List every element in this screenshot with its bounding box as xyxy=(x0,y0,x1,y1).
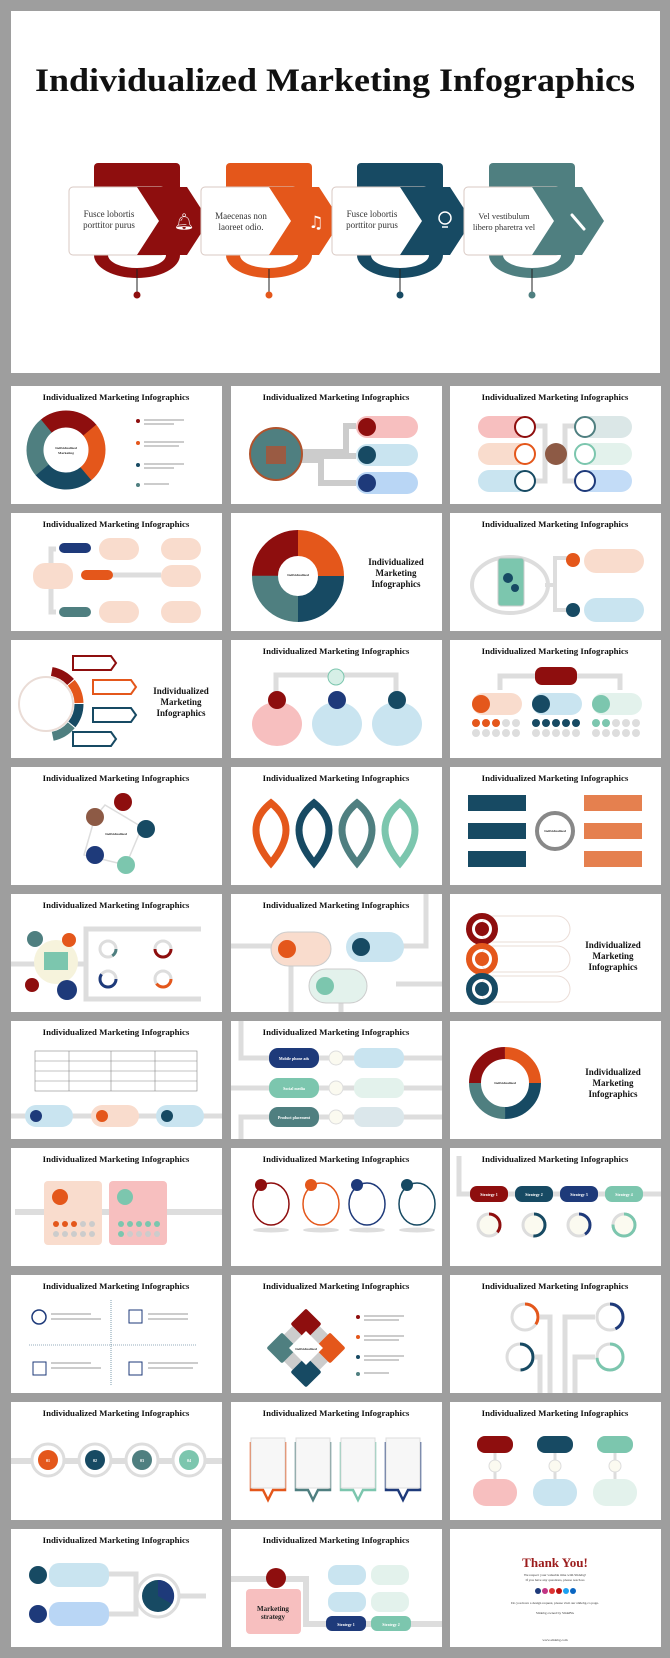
step 3: Fusce lobortis xyxy=(347,209,398,219)
panel: thumb 10 pentagon: Individualized xyxy=(105,832,127,836)
panel: thumb 20 four rings xyxy=(231,1148,442,1266)
panel: thumb 14 pipes: Individualized Marketing Infographics xyxy=(263,900,410,910)
panel: thumb 23 diamond: Individualized Marketing Infographics xyxy=(263,1281,410,1291)
panel: thumb 19 two cards: Individualized Marketing Infographics xyxy=(43,1154,190,1164)
panel: thumb 28 customers pie: Individualized Marketing Infographics xyxy=(43,1535,190,1545)
panel: thumb 15 rings xyxy=(450,894,661,1012)
panel: thumb 30 thank you: Slidebg owned by SlideBG xyxy=(536,1611,575,1615)
panel: thumb 22 quadrants: Individualized Marketing Infographics xyxy=(43,1281,190,1291)
panel: thumb 18 flower ring: Infographics xyxy=(588,1089,638,1099)
panel: thumb 9 strategy dots xyxy=(450,640,661,758)
panel: thumb 21 strategies: Strategy 1 xyxy=(480,1192,498,1197)
step 4 xyxy=(464,163,604,298)
panel: thumb 29 marketing strategy: Marketing xyxy=(257,1605,289,1613)
panel: thumb 29 marketing strategy: Strategy 2 xyxy=(382,1622,400,1627)
panel: thumb 29 marketing strategy: Individualized Marketing Infographics xyxy=(263,1535,410,1545)
panel: thumb 18 flower ring: Individualized xyxy=(494,1081,516,1085)
panel: thumb 17 channels rows: Social media xyxy=(283,1086,305,1091)
panel: thumb 17 channels rows: Individualized Marketing Infographics xyxy=(263,1027,410,1037)
panel: thumb 14 pipes xyxy=(231,894,442,1012)
panel: thumb 7 arcs: Infographics xyxy=(156,708,206,718)
step 4: libero pharetra vel xyxy=(473,222,536,232)
panel: thumb 12 bars: Individualized Marketing Infographics xyxy=(482,773,629,783)
panel: thumb 20 four rings: Individualized Marketing Infographics xyxy=(263,1154,410,1164)
panel: thumb 6 phone: Individualized Marketing Infographics xyxy=(482,519,629,529)
icon: bulb xyxy=(439,212,451,227)
icon: music: ♫ xyxy=(308,213,324,233)
panel: thumb 9 strategy dots: Individualized Marketing Infographics xyxy=(482,646,629,656)
step 2: laoreet odio. xyxy=(219,222,263,232)
panel: thumb 18 flower ring: Marketing xyxy=(592,1078,634,1088)
panel: thumb 1 donut: Individualized Marketing Infographics xyxy=(43,392,190,402)
panel: thumb 18 flower ring: Individualized xyxy=(585,1067,641,1077)
panel: thumb 30 thank you xyxy=(450,1529,661,1647)
panel: thumb 1 donut: Marketing xyxy=(58,451,74,455)
panel: thumb 4 channels xyxy=(11,513,222,631)
panel: thumb 13 ages xyxy=(11,894,222,1012)
panel: thumb 19 two cards xyxy=(11,1148,222,1266)
icon: bell: 🔔︎ xyxy=(174,212,194,231)
panel: thumb 7 arcs: Marketing xyxy=(160,697,202,707)
panel: thumb 7 arcs: Individualized xyxy=(153,686,209,696)
panel: thumb 7 arcs xyxy=(11,640,222,758)
panel: thumb 21 strategies: Strategy 4 xyxy=(615,1192,633,1197)
panel: thumb 5 flower: Marketing xyxy=(376,568,417,578)
panel: thumb 5 flower: Infographics xyxy=(371,579,421,589)
panel: thumb 12 bars: Individualized xyxy=(544,829,566,833)
panel: thumb 23 diamond: Individualized xyxy=(295,1347,317,1351)
panel: thumb 5 flower: Individualized xyxy=(287,573,309,577)
panel: thumb 21 strategies xyxy=(450,1148,661,1266)
panel: thumb 5 flower: Individualized xyxy=(368,557,424,567)
panel: thumb 17 channels rows: Product placement xyxy=(278,1115,311,1120)
panel: thumb 25 four steps xyxy=(11,1402,222,1520)
step 1: Fusce lobortis xyxy=(84,209,135,219)
panel: thumb 21 strategies: Strategy 2 xyxy=(525,1192,543,1197)
panel: thumb 30 thank you: Thank You! xyxy=(522,1555,588,1570)
panel: thumb 5 flower xyxy=(231,513,442,631)
panel: thumb 22 quadrants xyxy=(11,1275,222,1393)
panel: thumb 18 flower ring xyxy=(450,1021,661,1139)
panel: thumb 15 rings: Individualized xyxy=(585,940,641,950)
panel: thumb 13 ages: Individualized Marketing Infographics xyxy=(43,900,190,910)
panel: thumb 27 customer types: Individualized Marketing Infographics xyxy=(482,1408,629,1418)
panel: thumb 30 thank you: www.slidebg.com xyxy=(542,1638,568,1642)
icon: wrench xyxy=(572,215,584,229)
step 1: porttitor purus xyxy=(83,220,135,230)
panel: thumb 17 channels rows: Mobile phone ads xyxy=(279,1056,310,1061)
panel: thumb 8 three customers xyxy=(231,640,442,758)
panel: thumb 28 customers pie xyxy=(11,1529,222,1647)
panel: thumb 21 strategies: Individualized Marketing Infographics xyxy=(482,1154,629,1164)
panel: thumb 30 thank you: Do you have a design request, please visit our slidebg.co page. xyxy=(511,1601,599,1606)
panel: thumb 15 rings: Infographics xyxy=(588,962,638,972)
panel: thumb 1 donut xyxy=(11,386,222,504)
panel: thumb 25 four steps: 02 xyxy=(93,1458,97,1463)
panel: thumb 26 bookmarks xyxy=(231,1402,442,1520)
panel: thumb 30 thank you: If you have any questions, please reach us xyxy=(526,1578,585,1583)
panel: thumb 17 channels rows xyxy=(231,1021,442,1139)
panel: thumb 25 four steps: 03 xyxy=(140,1458,144,1463)
panel: thumb 4 channels: Individualized Marketing Infographics xyxy=(43,519,190,529)
step 3 xyxy=(332,163,472,298)
panel: thumb 30 thank you: We respect your valuable time with Slidebg! xyxy=(524,1573,586,1577)
panel: thumb 10 pentagon xyxy=(11,767,222,885)
panel: thumb 10 pentagon: Individualized Marketing Infographics xyxy=(43,773,190,783)
panel: thumb 3 megaphone xyxy=(450,386,661,504)
panel: thumb 23 diamond xyxy=(231,1275,442,1393)
step 2 xyxy=(201,163,341,298)
step 3: porttitor purus xyxy=(346,220,398,230)
panel: main slide xyxy=(11,11,660,373)
panel: thumb 2 customers: Individualized Marketing Infographics xyxy=(263,392,410,402)
panel: thumb 2 customers xyxy=(231,386,442,504)
panel: thumb 29 marketing strategy: Strategy 1 xyxy=(337,1622,355,1627)
panel: thumb 16 table: Individualized Marketing Infographics xyxy=(43,1027,190,1037)
panel: thumb 25 four steps: 04 xyxy=(187,1458,191,1463)
step 1 xyxy=(69,163,209,298)
panel: thumb 11 leaves xyxy=(231,767,442,885)
panel: thumb 24 donut pipes xyxy=(450,1275,661,1393)
panel: thumb 24 donut pipes: Individualized Marketing Infographics xyxy=(482,1281,629,1291)
panel: thumb 6 phone xyxy=(450,513,661,631)
panel: thumb 1 donut: Individualized xyxy=(55,446,77,450)
panel: thumb 3 megaphone: Individualized Marketing Infographics xyxy=(482,392,629,402)
panel: thumb 25 four steps: 01 xyxy=(46,1458,50,1463)
panel: thumb 11 leaves: Individualized Marketing Infographics xyxy=(263,773,410,783)
panel: thumb 29 marketing strategy xyxy=(231,1529,442,1647)
panel: thumb 8 three customers: Individualized Marketing Infographics xyxy=(263,646,410,656)
panel: thumb 16 table xyxy=(11,1021,222,1139)
panel: thumb 27 customer types xyxy=(450,1402,661,1520)
panel: thumb 29 marketing strategy: strategy xyxy=(261,1613,286,1621)
panel: thumb 12 bars xyxy=(450,767,661,885)
title: Individualized Marketing Infographics xyxy=(35,63,635,99)
step 2: Maecenas non xyxy=(215,211,267,221)
step 4: Vel vestibulum xyxy=(478,211,530,221)
panel: thumb 25 four steps: Individualized Marketing Infographics xyxy=(43,1408,190,1418)
panel: thumb 26 bookmarks: Individualized Marketing Infographics xyxy=(263,1408,410,1418)
panel: thumb 21 strategies: Strategy 3 xyxy=(570,1192,588,1197)
panel: thumb 15 rings: Marketing xyxy=(592,951,634,961)
